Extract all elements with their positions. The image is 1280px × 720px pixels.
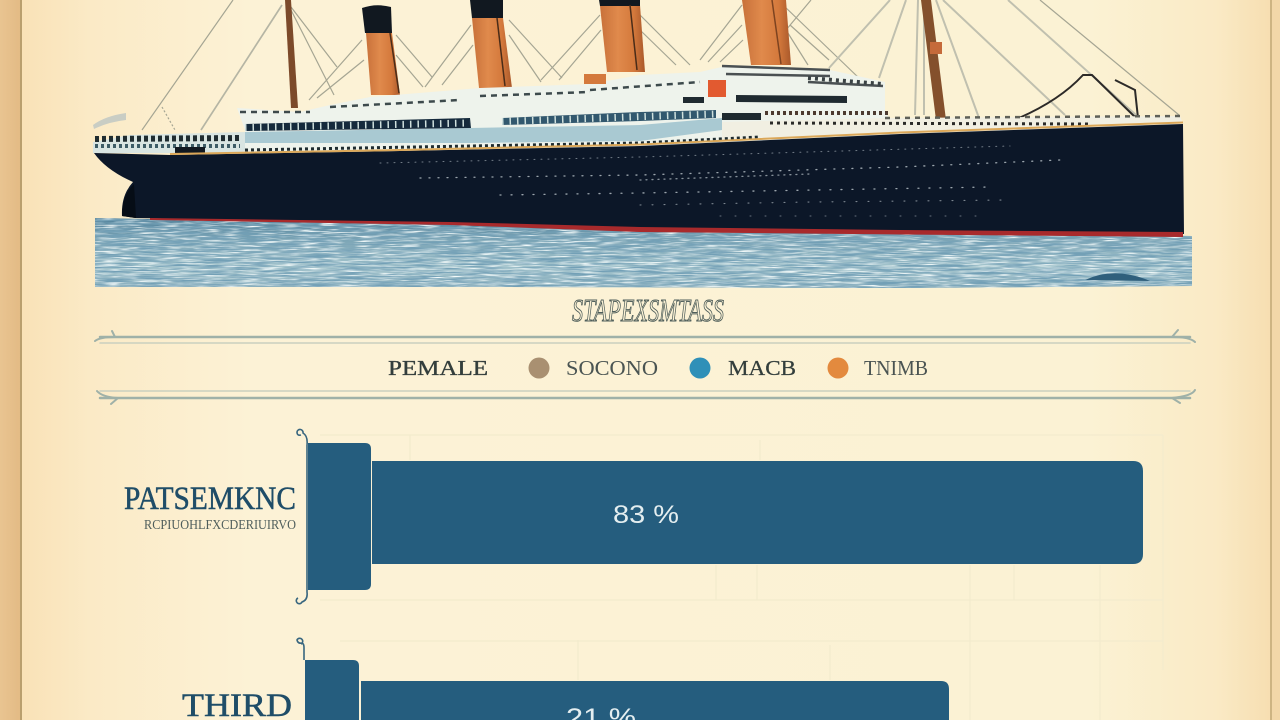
rear mast [285, 0, 298, 108]
funnel 2 [470, 0, 512, 88]
superstructure upper decks [237, 65, 892, 153]
gold hull stripe [170, 122, 1183, 154]
bar cap [305, 660, 359, 720]
stern deck [93, 113, 245, 153]
deck crane [1019, 75, 1138, 118]
forward deck band [722, 116, 1183, 141]
water [95, 218, 1192, 289]
lower ornamental rule [97, 390, 1195, 404]
hull portholes [380, 146, 1060, 216]
bar group: second row [182, 638, 949, 720]
legend swatch orange [828, 358, 848, 378]
legend label mach: MACB [728, 356, 796, 380]
bar cap [308, 443, 371, 590]
hull [94, 124, 1184, 234]
funnel 1 [362, 5, 400, 95]
ornate title: STAPEXSMTASS [572, 292, 724, 328]
orange deck house [708, 80, 726, 97]
legend label female: PEMALE [388, 356, 488, 380]
funnel 4 [742, 0, 791, 65]
faint chart grid [320, 435, 1163, 720]
row label: PATSEMKNC [124, 481, 296, 517]
legend swatch tan [528, 358, 550, 378]
deck vent housing [584, 74, 606, 84]
upper ornamental rule [95, 330, 1195, 343]
legend [388, 356, 928, 380]
funnel 3 [599, 0, 645, 72]
bar group: first row [124, 429, 1143, 604]
forward mast [921, 0, 946, 120]
bracket with curl [297, 638, 304, 660]
bar value: 83 % [613, 501, 679, 529]
legend label second: SOCONO [566, 356, 658, 380]
waterline red stripe [150, 218, 1183, 237]
bar 21 percent [361, 681, 949, 720]
ship illustration [93, 0, 1192, 289]
rudder [122, 184, 136, 218]
rigging lines [142, 0, 1179, 130]
row sublabel: RCPIUOHLFXCDERIUIRVO [144, 517, 296, 532]
lower porthole row [245, 137, 760, 150]
bar 83 percent [372, 461, 1143, 564]
legend swatch blue [690, 358, 710, 378]
bracket with curls [296, 429, 307, 604]
legend label third: TNIMB [864, 356, 928, 380]
